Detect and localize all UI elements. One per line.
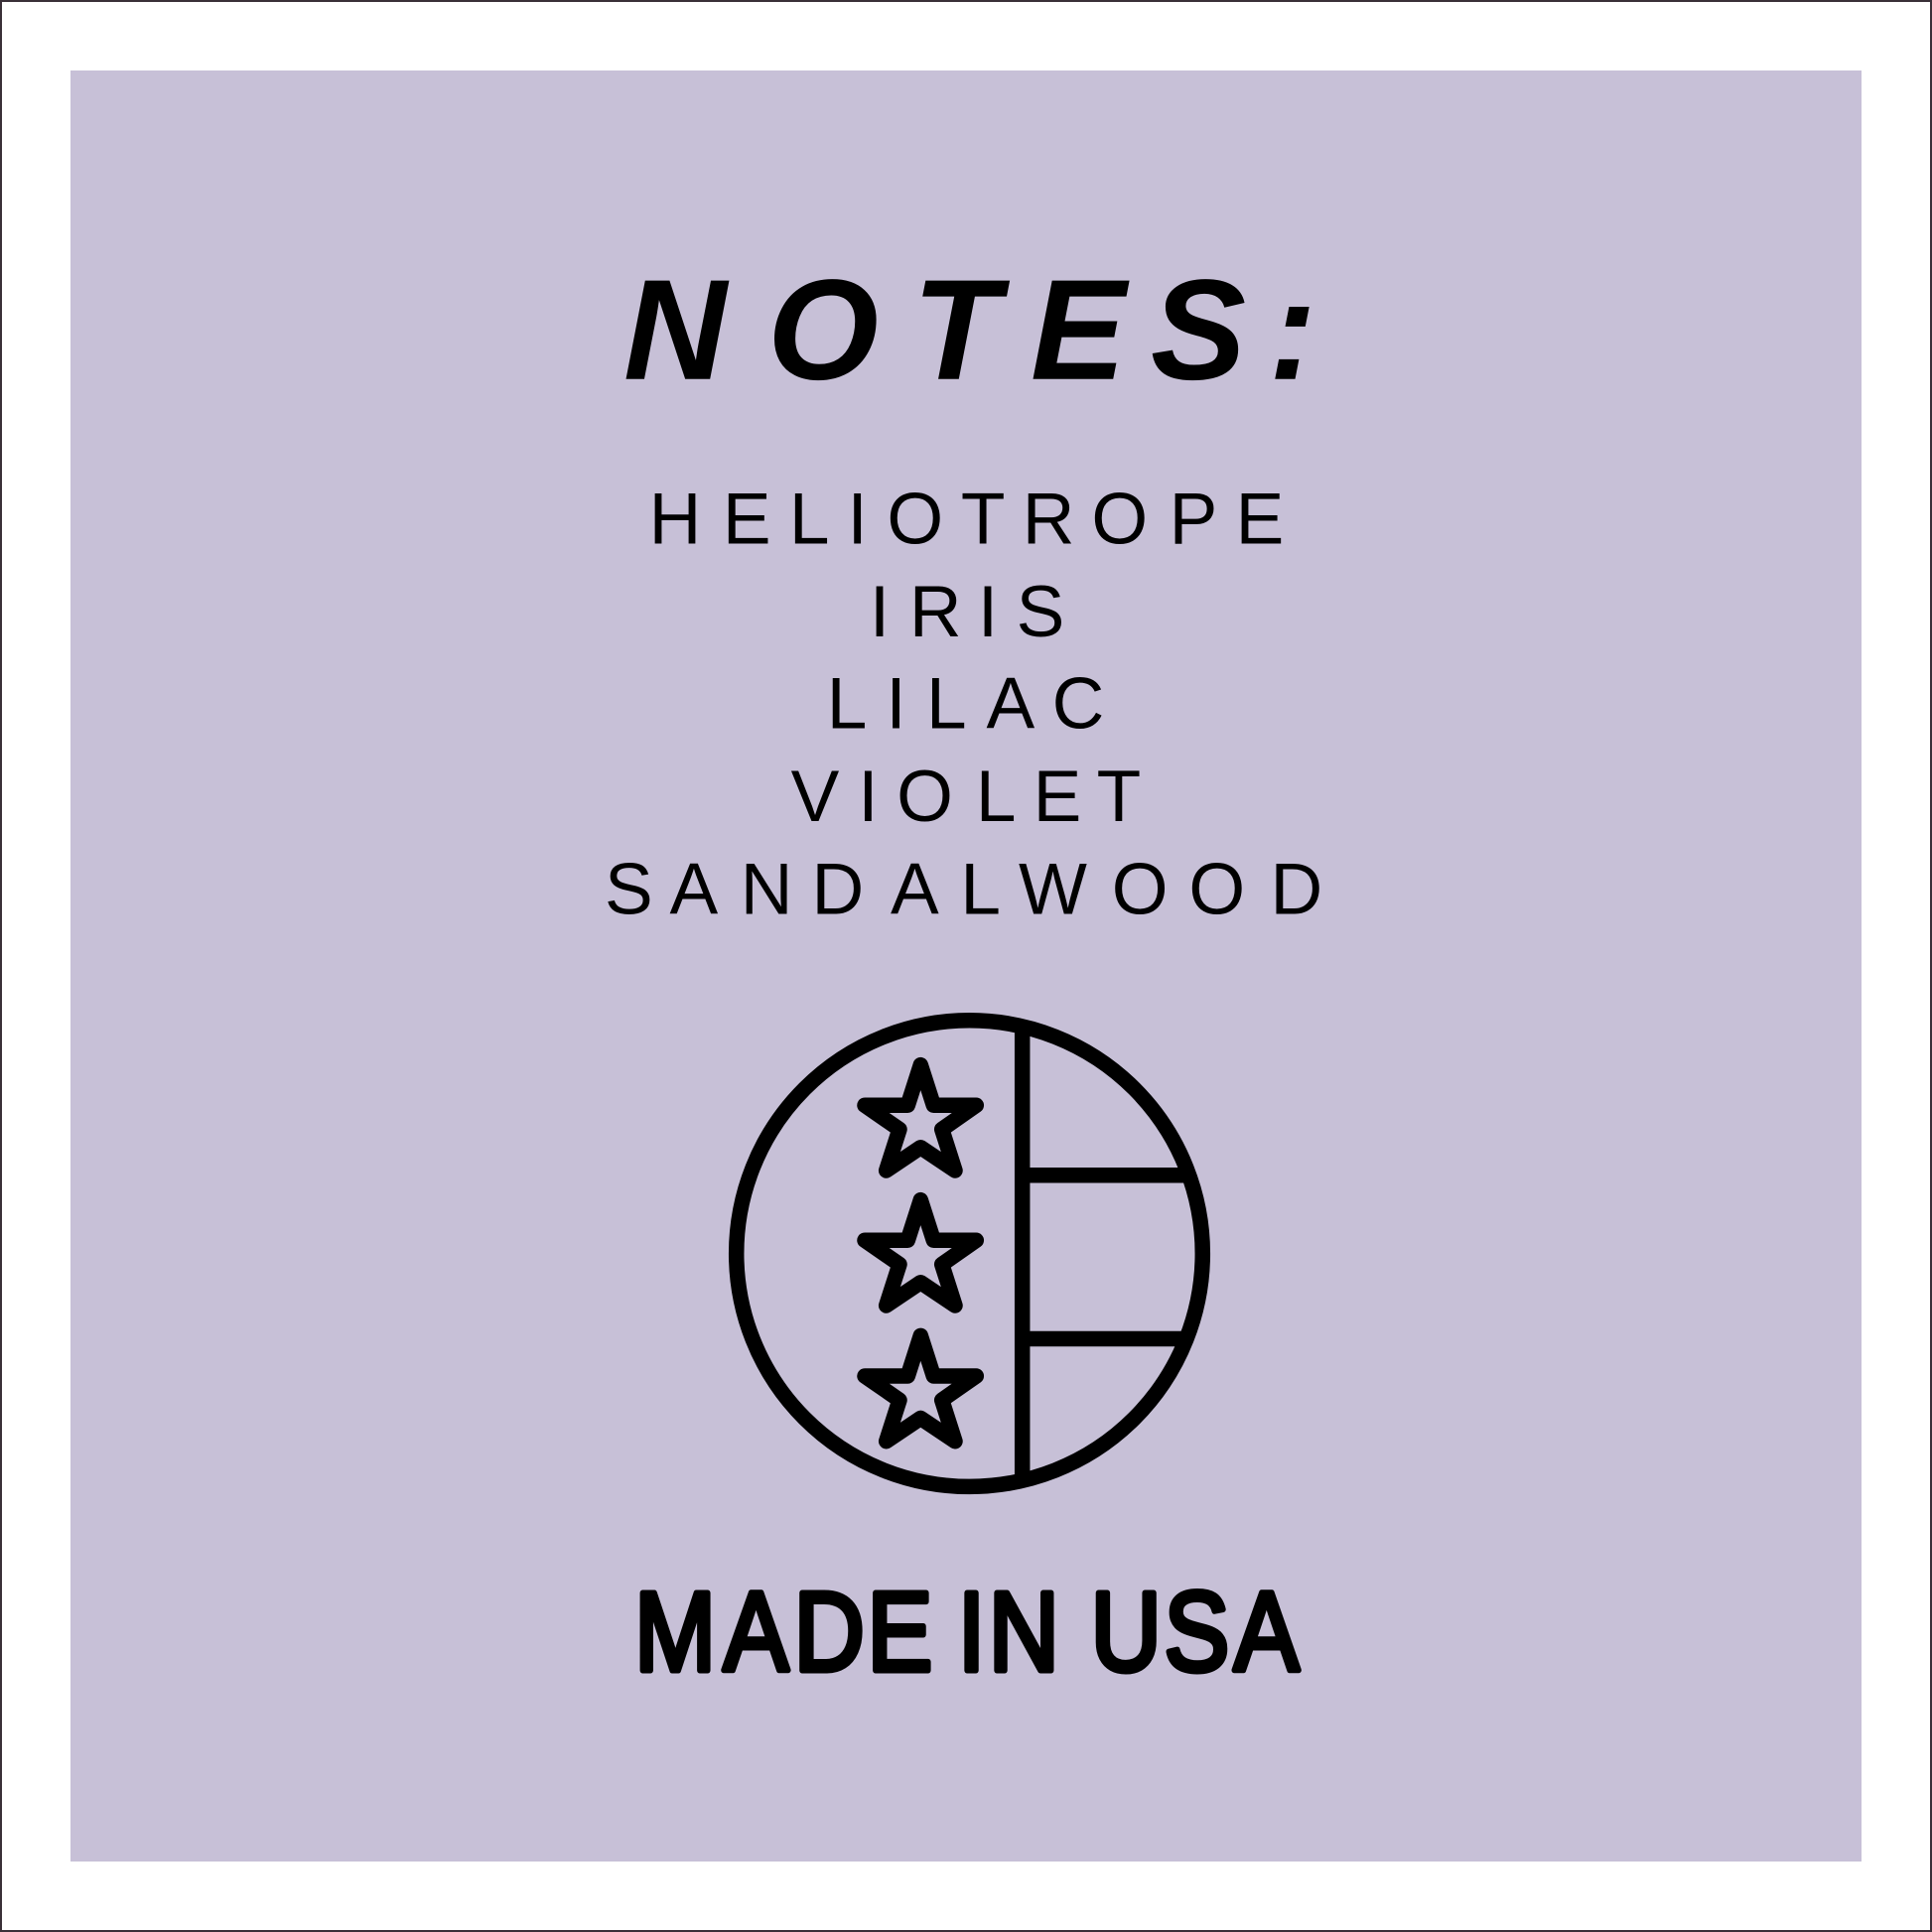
flag outline circle bbox=[737, 1021, 1202, 1486]
star: middle bbox=[865, 1200, 976, 1306]
title: notes: NOTES: bbox=[623, 250, 1316, 410]
flag vertical divider bbox=[1015, 1023, 1030, 1484]
flag upper stripe bbox=[1023, 1168, 1191, 1183]
star: top bbox=[865, 1065, 976, 1171]
icon: usa flag circle bbox=[737, 1021, 1202, 1486]
note: lilac: LILAC bbox=[827, 663, 1104, 745]
note: iris: IRIS bbox=[870, 572, 1064, 652]
note: heliotrope: HELIOTROPE bbox=[649, 479, 1284, 559]
list: fragrance notes bbox=[605, 479, 1322, 929]
label: made in usa: MADE IN USA bbox=[634, 1570, 1300, 1695]
star: bottom bbox=[865, 1335, 976, 1442]
flag lower stripe bbox=[1023, 1331, 1189, 1346]
note: sandalwood: SANDALWOOD bbox=[605, 850, 1322, 929]
note: violet: VIOLET bbox=[791, 757, 1141, 837]
